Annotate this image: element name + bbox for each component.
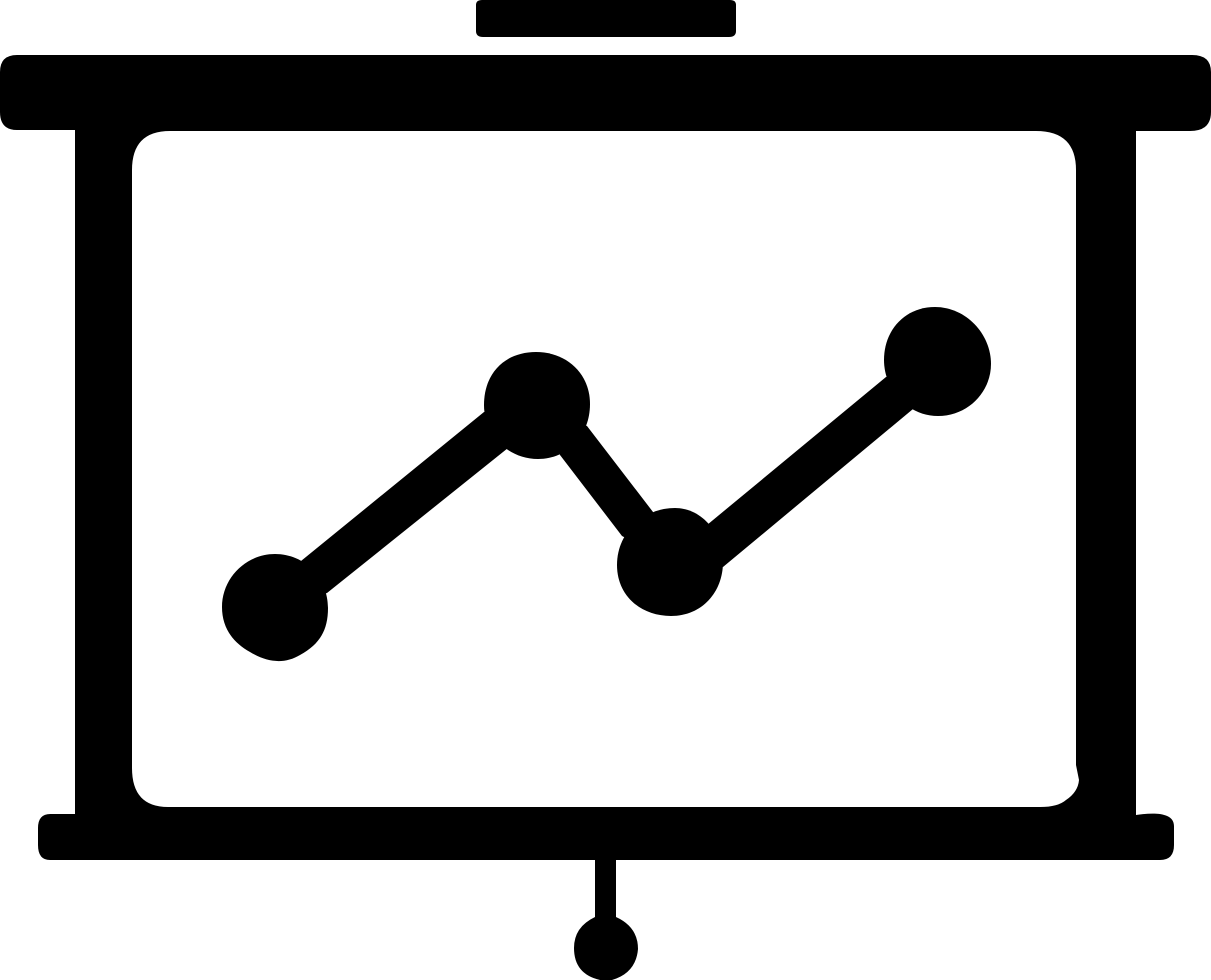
data point 2 (484, 352, 590, 459)
line segments (275, 361, 938, 608)
icon: top hanging bracket (476, 0, 736, 37)
data point 4 (884, 307, 991, 416)
data point 3 (617, 508, 723, 616)
data point 1 (222, 554, 328, 661)
chart line with data points (222, 307, 991, 661)
